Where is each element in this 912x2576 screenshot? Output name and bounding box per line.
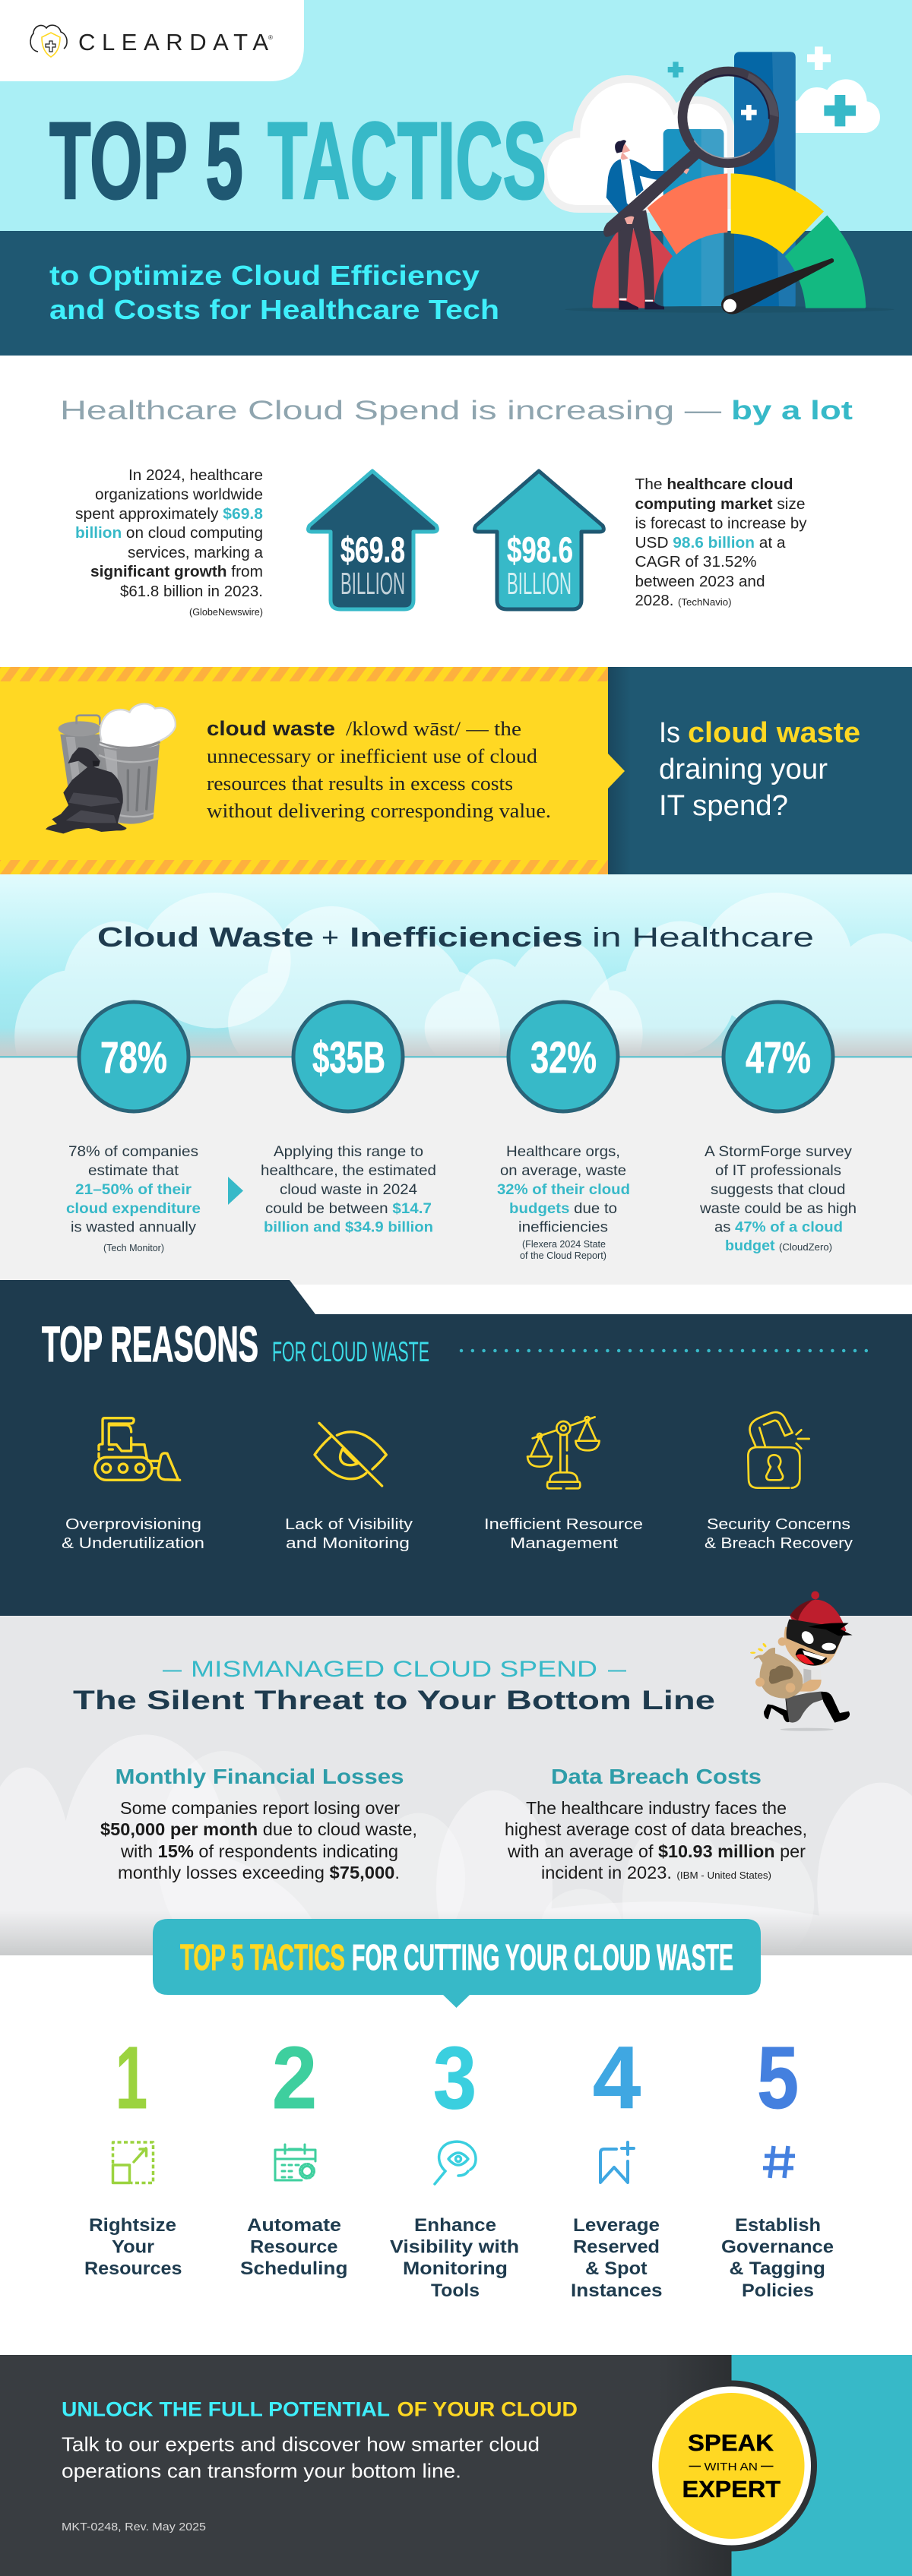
tactic 2: automate: Resource [250, 2236, 337, 2258]
stat: 78% [79, 1002, 188, 1111]
block: monthly financial losses: with 15% of respondents indicating [120, 1841, 398, 1861]
text: 2024 spend: services, marking a [128, 545, 264, 561]
text: 2024 spend: In 2024, healthcare [128, 467, 263, 484]
subtitle: and Costs for Healthcare Tech [49, 294, 499, 325]
labels: Overprovisioning [65, 1516, 201, 1533]
tactic 4: leverage reserved: & Spot [585, 2258, 648, 2279]
text: stat 1: cloud expenditure [66, 1200, 201, 1217]
tactic 4: leverage reserved: 4 [593, 2028, 641, 2127]
text: stat 2: healthcare, the estimated [261, 1162, 436, 1179]
tactic 5: governance: Policies [742, 2280, 814, 2301]
text: question: cloud waste [688, 717, 860, 749]
block: data breach costs: The healthcare industry faces the [526, 1798, 787, 1818]
tactic 3: enhance visibility: Tools [431, 2280, 480, 2301]
illustration: running thief with money bag [750, 1591, 853, 1731]
stat: 47% [724, 1002, 833, 1111]
logo panel: ® [268, 34, 273, 41]
panel: top 5 tactics [84, 1919, 834, 2301]
icon: ClearData cloud shield [30, 25, 67, 57]
text: market forecast: between 2023 and [635, 574, 765, 590]
text: stat 3: of the Cloud Report) [520, 1250, 606, 1261]
logo wordmark: CLEARDATA [78, 29, 268, 55]
text: market forecast: 2028. (TechNavio) [635, 593, 731, 609]
arrow: $98.6 billion: $98.6 [507, 529, 573, 570]
block: monthly financial losses: $50,000 per month due to cloud waste, [100, 1819, 417, 1839]
text: stat 1: 21–50% of their [75, 1181, 192, 1198]
button: speak with an expert: EXPERT [682, 2476, 781, 2502]
text: stat 3 [497, 1143, 630, 1261]
text: stat 2: billion and $34.9 billion [264, 1218, 433, 1235]
cloud fade overlay [0, 1027, 912, 1057]
arrow: $69.8 billion: $69.8 [340, 529, 405, 570]
text: 2024 spend: organizations worldwide [95, 486, 263, 503]
tactic 1: rightsize: Resources [84, 2258, 182, 2279]
background clouds [0, 1735, 912, 1930]
tactic 4: leverage reserved [571, 2028, 663, 2301]
callout banner [153, 1919, 761, 2008]
text: stat 3: on average, waste [500, 1162, 626, 1179]
text: stat 3: Healthcare orgs, [506, 1143, 620, 1160]
block: data breach costs: highest average cost of data breaches, [505, 1819, 807, 1839]
block: data breach costs: with an average of $10.93 million per [507, 1841, 806, 1861]
heading: Cloud Waste [97, 921, 314, 953]
labels: & Underutilization [62, 1535, 204, 1552]
yellow definition background [0, 667, 608, 874]
text: stat 4: suggests that cloud [711, 1181, 845, 1198]
text: stat 4: A StormForge survey [705, 1143, 852, 1160]
callout banner: TOP 5 TACTICS [180, 1938, 345, 1978]
text: stat 1: estimate that [88, 1162, 179, 1179]
block: data breach costs: incident in 2023. (IBM - United States) [541, 1863, 771, 1882]
text: question: Is [659, 717, 680, 749]
text: cloud waste definition: resources that results in excess costs [207, 773, 513, 795]
tactic 4: leverage reserved: Reserved [573, 2236, 660, 2258]
tactic 5: governance: Governance [721, 2236, 834, 2258]
heading: + [321, 921, 339, 953]
panel: cloud waste statistics [0, 874, 912, 1285]
stat: 32% [508, 1002, 618, 1111]
tactic 1: rightsize: Rightsize [89, 2215, 176, 2236]
text: footer body: Talk to our experts and discover how smarter cloud [62, 2432, 540, 2455]
tactic 2: automate: 2 [272, 2028, 317, 2127]
text: 2024 spend: $61.8 billion in 2023. [120, 583, 263, 600]
tactic 3: enhance visibility: 3 [433, 2028, 477, 2127]
arrow: $98.6 billion [475, 471, 603, 609]
light grey background [0, 1057, 912, 1285]
text: footer body [62, 2432, 540, 2483]
text: cloud waste definition: without delivering corresponding value. [207, 800, 551, 822]
tactic 5: governance: 5 [757, 2028, 799, 2127]
heading: in Healthcare [592, 921, 814, 953]
panel: header [0, 0, 912, 356]
arrow: $69.8 billion [309, 471, 437, 609]
panel: healthcare cloud spend [60, 396, 853, 618]
tactic 4: leverage reserved: Instances [571, 2280, 663, 2301]
labels: and Monitoring [286, 1535, 410, 1552]
heading [97, 921, 814, 953]
stat: $35B: $35B [312, 1033, 385, 1083]
text: stat 4: waste could be as high [699, 1200, 857, 1217]
text: market forecast [635, 476, 807, 609]
icon: bulldozer [95, 1418, 180, 1480]
text: 2024 spend [75, 467, 264, 618]
block: monthly financial losses: Some companies report losing over [120, 1798, 400, 1818]
text: stat 3: inefficiencies [518, 1218, 608, 1235]
text: stat 3: 32% of their cloud [497, 1181, 630, 1198]
illustration: trash cans with cloud and bag [46, 704, 176, 833]
icon: crossed-out eye [315, 1423, 386, 1486]
text: question: IT spend? [659, 790, 788, 822]
tactic 1: rightsize [84, 2028, 182, 2279]
button: speak with an expert: WITH AN [704, 2461, 758, 2473]
text: market forecast: The healthcare cloud [635, 476, 793, 493]
text: stat 1: (Tech Monitor) [103, 1242, 164, 1253]
text: question: draining your [659, 754, 828, 785]
heading: unlock [62, 2397, 578, 2420]
heading: mismanaged cloud spend: The Silent Threat to Your Bottom Line [73, 1686, 715, 1715]
title: TOP 5 TACTICS: TACTICS [268, 100, 546, 222]
arrow: stat 1 to stat 2 [228, 1177, 243, 1205]
panel: cloud waste definition [0, 667, 912, 874]
heading: unlock: UNLOCK THE FULL POTENTIAL [62, 2397, 390, 2420]
arrow: definition to question [608, 754, 625, 789]
dark footer background [0, 2355, 732, 2576]
tactic 2: automate [240, 2028, 348, 2279]
heading: by a lot [731, 396, 853, 425]
text: market forecast: CAGR of 31.52% [635, 554, 757, 571]
text: stat 2: cloud waste in 2024 [280, 1181, 417, 1198]
labels: & Breach Recovery [705, 1535, 853, 1552]
tactic 2: automate: Scheduling [240, 2258, 348, 2279]
block: monthly financial losses [100, 1765, 417, 1882]
background clouds [14, 893, 912, 1053]
tactic 3: enhance visibility [390, 2028, 519, 2301]
text: stat 2 [261, 1143, 436, 1235]
text: 2024 spend: spent approximately $69.8 [75, 506, 263, 523]
labels: Lack of Visibility [285, 1516, 413, 1533]
sky background [0, 874, 912, 1057]
panel: mismanaged cloud spend [0, 1591, 912, 1955]
stat: 32%: 32% [530, 1033, 597, 1083]
tactic 5: governance: & Tagging [730, 2258, 825, 2279]
heading: FOR CLOUD WASTE [272, 1336, 429, 1367]
stat: $35B [293, 1002, 403, 1111]
icon: open padlock [748, 1412, 809, 1488]
text: stat 1: is wasted annually [71, 1218, 196, 1235]
grey background [0, 1616, 912, 1955]
header dark band [0, 231, 912, 356]
button: speak with an expert: SPEAK [688, 2429, 774, 2456]
cloud fade overlay [0, 1911, 912, 1955]
block: data breach costs: Data Breach Costs [551, 1765, 762, 1788]
text: 2024 spend: billion on cloud computing [75, 525, 263, 542]
arrow: $98.6 billion: BILLION [507, 566, 572, 601]
tactic 1: rightsize: Your [112, 2236, 154, 2258]
text: stat 4 [699, 1143, 857, 1254]
heading: mismanaged cloud spend: — [608, 1657, 626, 1682]
tactic 3: enhance visibility: Enhance [414, 2215, 496, 2236]
text: stat 3: (Flexera 2024 State [522, 1238, 606, 1250]
text: stat 2: could be between $14.7 [265, 1200, 432, 1217]
blue question panel [608, 667, 912, 874]
dark tabbed background [0, 1280, 912, 1616]
heading: Healthcare Cloud Spend is increasing — [60, 396, 721, 425]
stat: 47%: 47% [746, 1033, 811, 1083]
labels: Security Concerns [707, 1516, 850, 1533]
heading: unlock: OF YOUR CLOUD [397, 2397, 578, 2420]
subtitle [49, 260, 499, 325]
button: speak with an expert [652, 2381, 817, 2551]
icon: unbalanced scales [527, 1417, 600, 1488]
stat: 78%: 78% [100, 1033, 167, 1083]
tactic 5: governance: Establish [735, 2215, 821, 2236]
heading: TOP REASONS [42, 1316, 258, 1372]
teal footer block [731, 2355, 912, 2576]
arrow: $69.8 billion: BILLION [340, 566, 405, 601]
tactic 3: enhance visibility: Monitoring [403, 2258, 508, 2279]
heading: Inefficiencies [350, 921, 583, 953]
heading: mismanaged cloud spend [73, 1657, 715, 1715]
text: market forecast: is forecast to increase by [635, 515, 807, 532]
tactic 1: rightsize: 1 [116, 2028, 147, 2127]
panel: footer call to action [0, 2355, 912, 2576]
text: 2024 spend: significant growth from [90, 564, 263, 580]
text: stat 4: budget (CloudZero) [725, 1237, 832, 1254]
labels: Management [510, 1535, 619, 1552]
title: TOP 5 TACTICS: TOP 5 [49, 100, 243, 222]
tactic 5: governance [721, 2028, 834, 2301]
tactic 2: automate: Automate [247, 2215, 341, 2236]
text: footer body: operations can transform your bottom line. [62, 2460, 461, 2483]
title: TOP 5 TACTICS [49, 100, 546, 222]
text: stat 3: budgets due to [509, 1200, 617, 1217]
text: cloud waste definition: unnecessary or inefficient use of cloud [207, 745, 537, 767]
block: data breach costs [505, 1765, 807, 1882]
text: stat 1 [66, 1143, 201, 1253]
text: stat 1: 78% of companies [68, 1143, 198, 1160]
labels: Inefficient Resource [484, 1516, 643, 1533]
block: monthly financial losses: Monthly Financial Losses [116, 1765, 404, 1788]
text: stat 4: as 47% of a cloud [714, 1218, 843, 1235]
text: cloud waste definition: cloud waste [207, 717, 335, 740]
logo panel [0, 0, 304, 81]
subtitle: to Optimize Cloud Efficiency [49, 260, 480, 291]
text: cloud waste definition: /klowd wāst/ — the [346, 718, 521, 740]
text: question [659, 717, 860, 822]
heading: mismanaged cloud spend: MISMANAGED CLOUD SPEND [191, 1657, 597, 1682]
document reference: MKT-0248, Rev. May 2025 [62, 2521, 206, 2533]
heading: mismanaged cloud spend: — [163, 1657, 182, 1682]
block: monthly financial losses: monthly losses exceeding $75,000. [118, 1863, 400, 1882]
labels [62, 1516, 853, 1552]
text: 2024 spend: (GlobeNewswire) [189, 606, 263, 618]
tactic 4: leverage reserved: Leverage [573, 2215, 660, 2236]
text: market forecast: computing market size [635, 496, 806, 513]
header sky background [0, 0, 912, 231]
text: stat 2: Applying this range to [274, 1143, 423, 1160]
text: market forecast: USD 98.6 billion at a [635, 535, 786, 552]
text: stat 4: of IT professionals [715, 1162, 841, 1179]
text: cloud waste definition [207, 717, 551, 822]
heading [60, 396, 853, 425]
illustration: cloud analytics gauge with person and magnifier [543, 46, 895, 314]
panel: top reasons [0, 1280, 912, 1616]
tactic 3: enhance visibility: Visibility with [390, 2236, 519, 2258]
